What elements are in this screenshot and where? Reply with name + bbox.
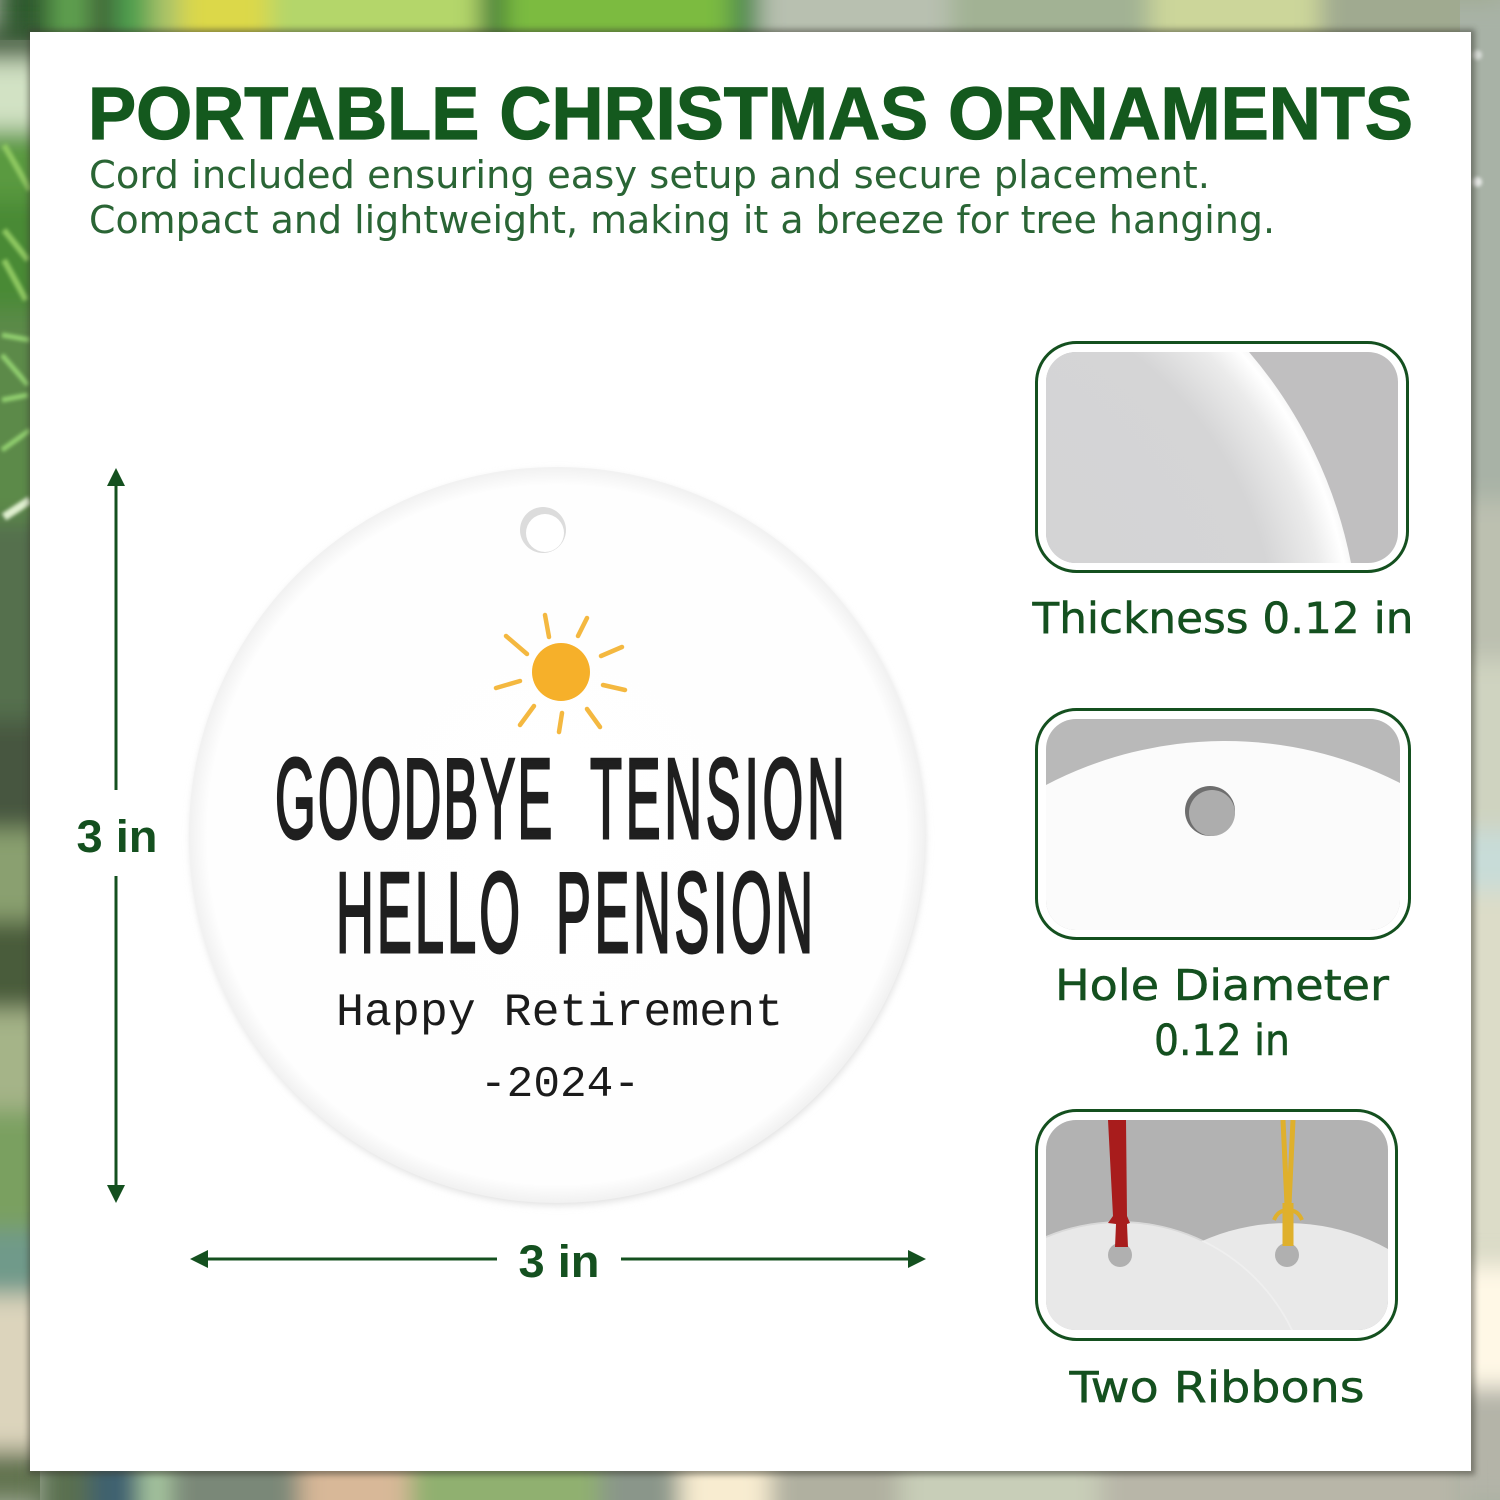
subtitle text block	[89, 153, 1275, 242]
icon: sun	[496, 615, 625, 732]
label: hole diameter: 0.12 in	[1154, 1016, 1290, 1066]
label: thickness: Thickness 0.12 in	[1031, 594, 1414, 644]
label: hole diameter	[1055, 961, 1389, 1066]
subtitle text block: Compact and lightweight, making it a breeze for tree hanging.	[89, 198, 1275, 242]
ornament: Happy Retirement	[336, 987, 783, 1039]
hole detail	[1185, 786, 1235, 836]
vertical dimension: 3 in: 3 in	[76, 811, 158, 862]
panel: thickness	[1031, 342, 1414, 644]
ornament message: HELLO	[336, 849, 520, 976]
red ribbon	[1108, 1120, 1130, 1247]
ornament	[189, 467, 925, 1205]
panel: two ribbons	[1036, 1110, 1396, 1413]
horizontal dimension: 3 in: 3 in	[518, 1236, 600, 1287]
label: hole diameter: Hole Diameter	[1055, 961, 1389, 1011]
label: two ribbons: Two Ribbons	[1068, 1363, 1364, 1413]
ornament message: TENSION	[590, 735, 845, 862]
vertical dimension: 3 in	[76, 468, 158, 1203]
ornament message: GOODBYE	[275, 735, 552, 862]
horizontal dimension: 3 in	[190, 1236, 926, 1287]
title: PORTABLE CHRISTMAS ORNAMENTS	[88, 72, 1413, 155]
panel: hole diameter	[1036, 710, 1410, 1066]
ornament hole	[520, 507, 566, 553]
ornament message	[275, 735, 845, 976]
ornament: -2024-	[480, 1060, 640, 1110]
gold cord	[1274, 1120, 1302, 1246]
ornament message: PENSION	[556, 849, 813, 976]
subtitle text block: Cord included ensuring easy setup and secure placement.	[89, 153, 1210, 197]
